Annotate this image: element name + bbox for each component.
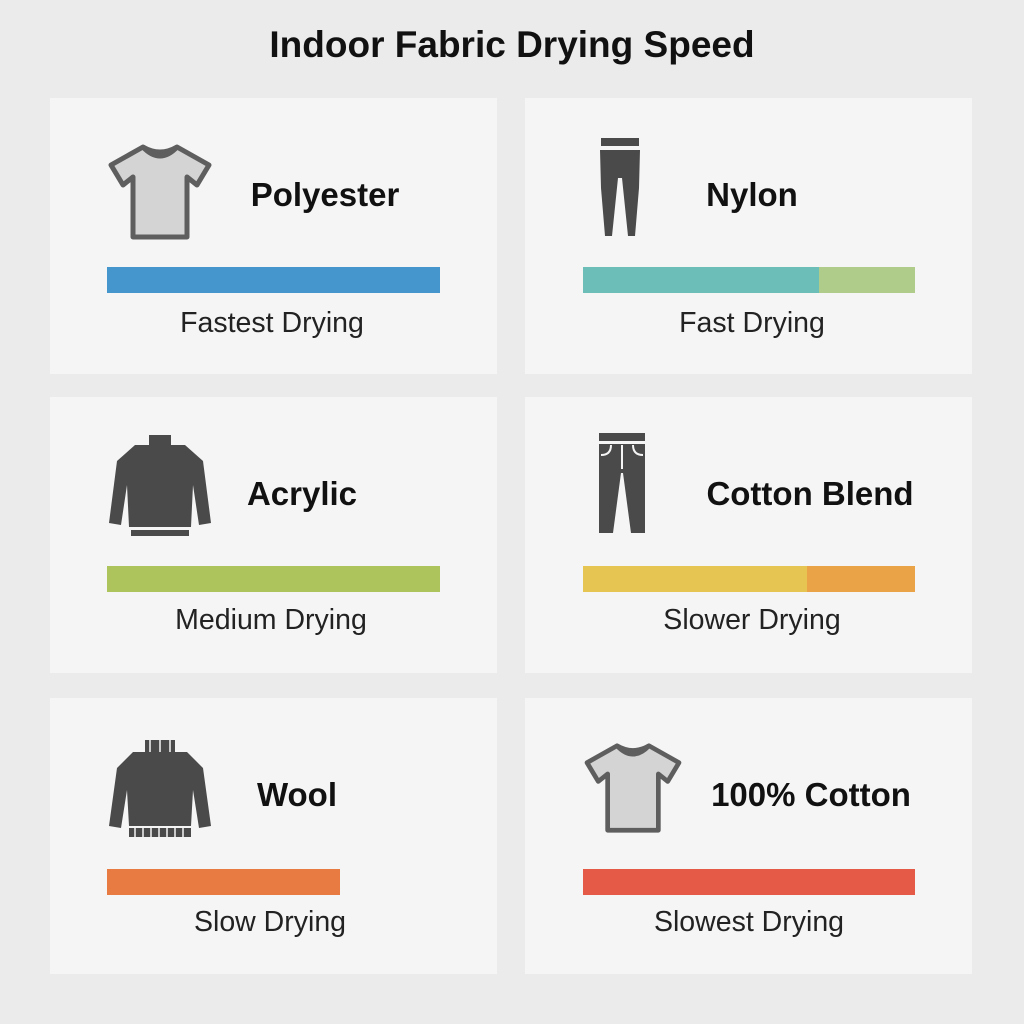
bar xyxy=(107,869,340,895)
bar xyxy=(583,566,915,592)
name: Wool xyxy=(257,776,337,813)
panel: polyester xyxy=(50,98,497,374)
bar xyxy=(107,267,440,293)
panel: 100% cotton xyxy=(525,698,972,974)
label: Medium Drying xyxy=(175,604,367,636)
label: Slower Drying xyxy=(663,604,841,636)
label: Slowest Drying xyxy=(654,906,844,938)
label: Fast Drying xyxy=(679,307,825,339)
bar xyxy=(583,267,915,293)
name: Polyester xyxy=(251,176,399,213)
bar xyxy=(583,869,915,895)
name: Acrylic xyxy=(247,475,357,512)
panel: cotton blend xyxy=(525,397,972,673)
icon: leggings xyxy=(600,138,640,236)
panel: wool xyxy=(50,698,497,974)
icon: sweater xyxy=(109,435,211,536)
icon: knit sweater xyxy=(109,740,211,837)
name: Cotton Blend xyxy=(706,475,914,512)
label: Fastest Drying xyxy=(180,307,364,339)
label: Slow Drying xyxy=(194,906,346,938)
icon: t-shirt xyxy=(108,144,212,240)
name: 100% Cotton xyxy=(711,776,911,813)
panel: acrylic xyxy=(50,397,497,673)
icon: jeans xyxy=(599,433,645,533)
icon: t-shirt xyxy=(584,743,682,833)
title: Indoor Fabric Drying Speed xyxy=(269,24,755,65)
name: Nylon xyxy=(706,176,798,213)
bar xyxy=(107,566,440,592)
panel: nylon xyxy=(525,98,972,374)
